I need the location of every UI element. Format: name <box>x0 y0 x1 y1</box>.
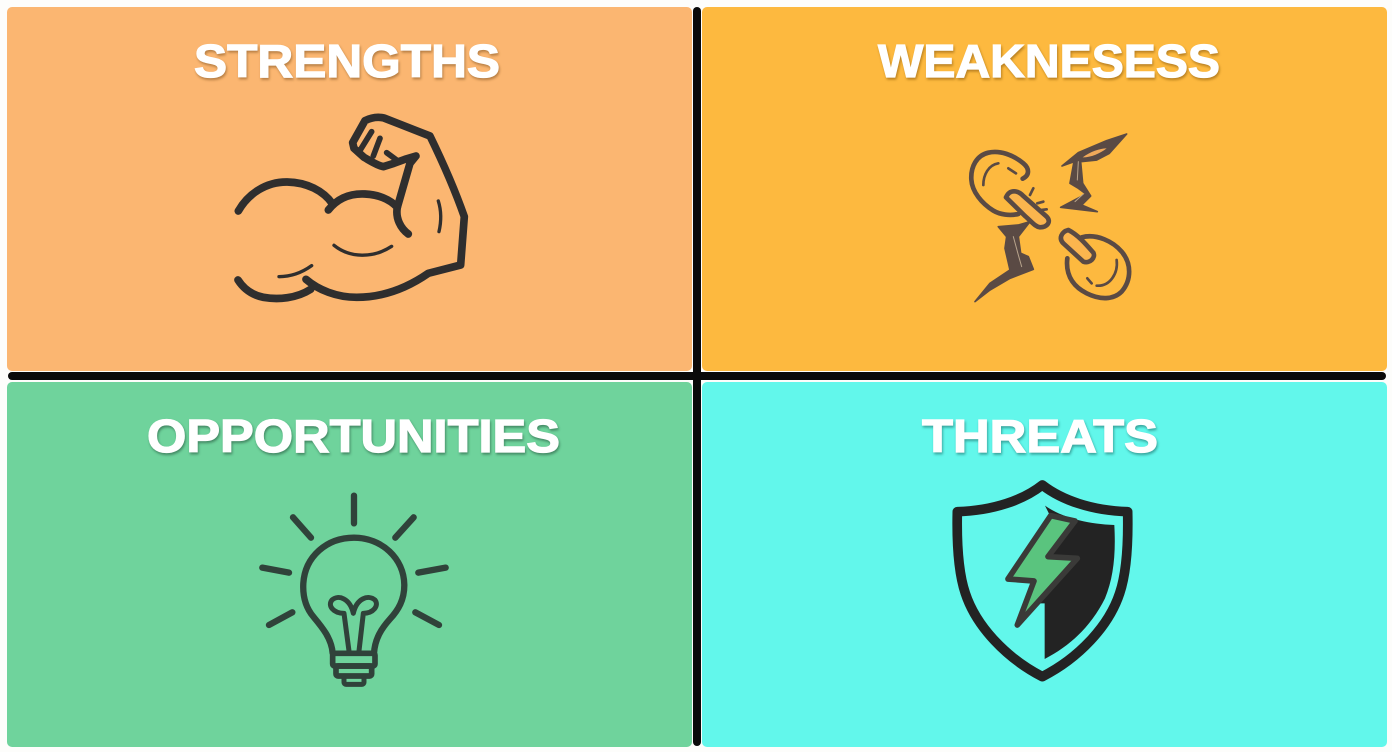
icon: light bulb <box>262 496 446 684</box>
heading: weaknesess: WEAKNESESS <box>878 35 1220 87</box>
heading: strengths: STRENGTHS <box>195 37 501 89</box>
panel: threats <box>702 382 1387 747</box>
heading: weaknesess: WEAKNESESS <box>879 37 1221 89</box>
panel: weaknesses <box>702 7 1387 371</box>
panel: opportunities <box>7 382 692 747</box>
heading: opportunities: OPPORTUNITIES <box>148 412 561 464</box>
horizontal divider <box>8 372 1386 380</box>
icon: flexed bicep <box>238 117 464 298</box>
shard: upper right <box>1061 134 1127 212</box>
shard: lower left <box>975 222 1033 302</box>
heading: threats: THREATS <box>922 410 1158 462</box>
icon: shield with lightning bolt <box>957 485 1128 677</box>
icon: broken chain <box>971 134 1129 302</box>
panel: strengths <box>7 7 692 371</box>
heading: opportunities: OPPORTUNITIES <box>147 410 560 462</box>
heading: threats: THREATS <box>923 412 1159 464</box>
vertical divider <box>693 7 701 746</box>
heading: strengths: STRENGTHS <box>194 35 500 87</box>
